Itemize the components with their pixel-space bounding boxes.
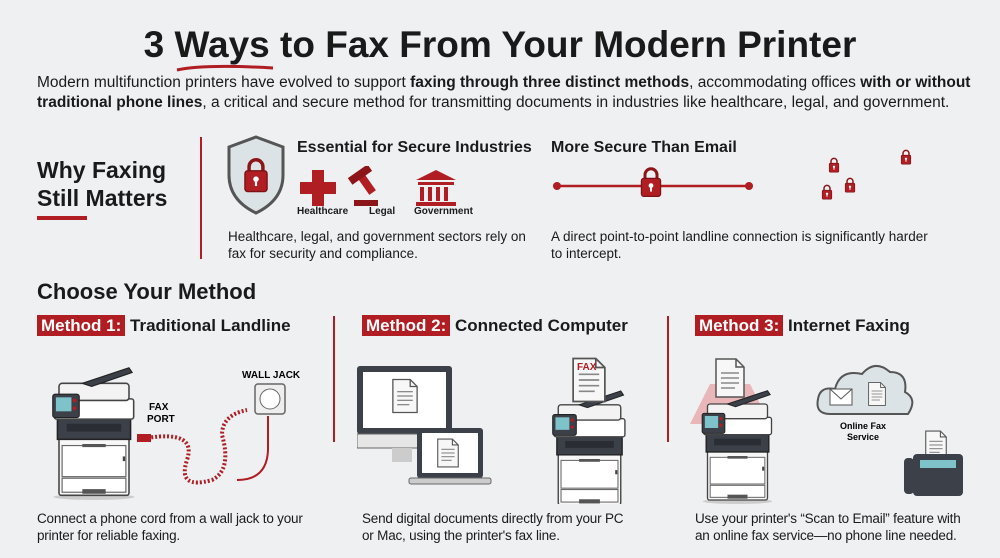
intro text: Modern multifunction printers have evolved to support faxing through three distinct methods, accommodating offices with or without traditional phone lines, a critical and secure method for transmitting documents in industries like healthcare, legal, and government. [37,74,970,111]
illustration: printer with cord: WALL JACK [242,370,301,381]
title underline [176,64,274,72]
heading: choose your method: Choose Your Method [37,279,256,304]
panel: method 2: Method 2: Connected Computer [366,316,628,335]
panel: method 3: Use your printer's “Scan to Email” feature with [695,511,961,526]
icon: scattered locks [822,150,912,200]
red accent bar [37,216,87,220]
heading: why faxing: Why Faxing [37,157,166,183]
illustration: scanner, cloud, fax: Service [847,432,879,442]
illustration: scanner, cloud, fax: Online Fax [840,421,886,431]
panel: more secure than email: A direct point-to-point landline connection is significantly harder to intercept. [551,229,928,261]
heading: why faxing: Still Matters [37,185,167,211]
illustration: printer with cord: PORT [147,414,175,425]
illustration: computer, laptop, printer [357,358,626,504]
icon: shield [228,135,284,215]
heading: Essential for Secure Industries [297,139,532,156]
illustration: computer, laptop, printer: FAX [577,362,597,373]
heading: why faxing [37,157,167,211]
panel: secure industries [228,135,532,261]
illustration: printer with cord: FAX [149,402,169,413]
panel: method 2: Send digital documents directly from your PC [362,511,623,526]
panel: method 1: Method 1: Traditional Landline [41,316,291,335]
icon labels: Healthcare [297,206,348,217]
panel: more secure than email: More Secure Than Email [551,139,737,156]
icons: industries [300,166,456,206]
panel: method 2: or Mac, using the printer's fax line. [362,528,560,543]
panel: method 3: an online fax service—no phone line needed. [695,528,957,543]
panel: method 1 [37,315,303,543]
icon: line with lock [553,167,753,197]
panel: method 2 [357,315,628,543]
panel: method 3: Method 3: Internet Faxing [699,316,910,335]
panel: method 1: Connect a phone cord from a wall jack to your [37,511,303,526]
panel: secure industries: Legal [369,206,395,217]
illustration: printer with cord [52,367,301,500]
illustration: scanner, cloud, fax [690,358,963,504]
body text: Healthcare, legal, and government sectors rely on fax for security and compliance. [228,229,526,261]
panel: method 1: printer for reliable faxing. [37,528,180,543]
panel: more secure than email [551,139,928,261]
title: 3 Ways to Fax From Your Modern Printer [144,24,856,65]
panel: secure industries: Government [414,206,473,217]
panel: method 3 [690,315,963,543]
